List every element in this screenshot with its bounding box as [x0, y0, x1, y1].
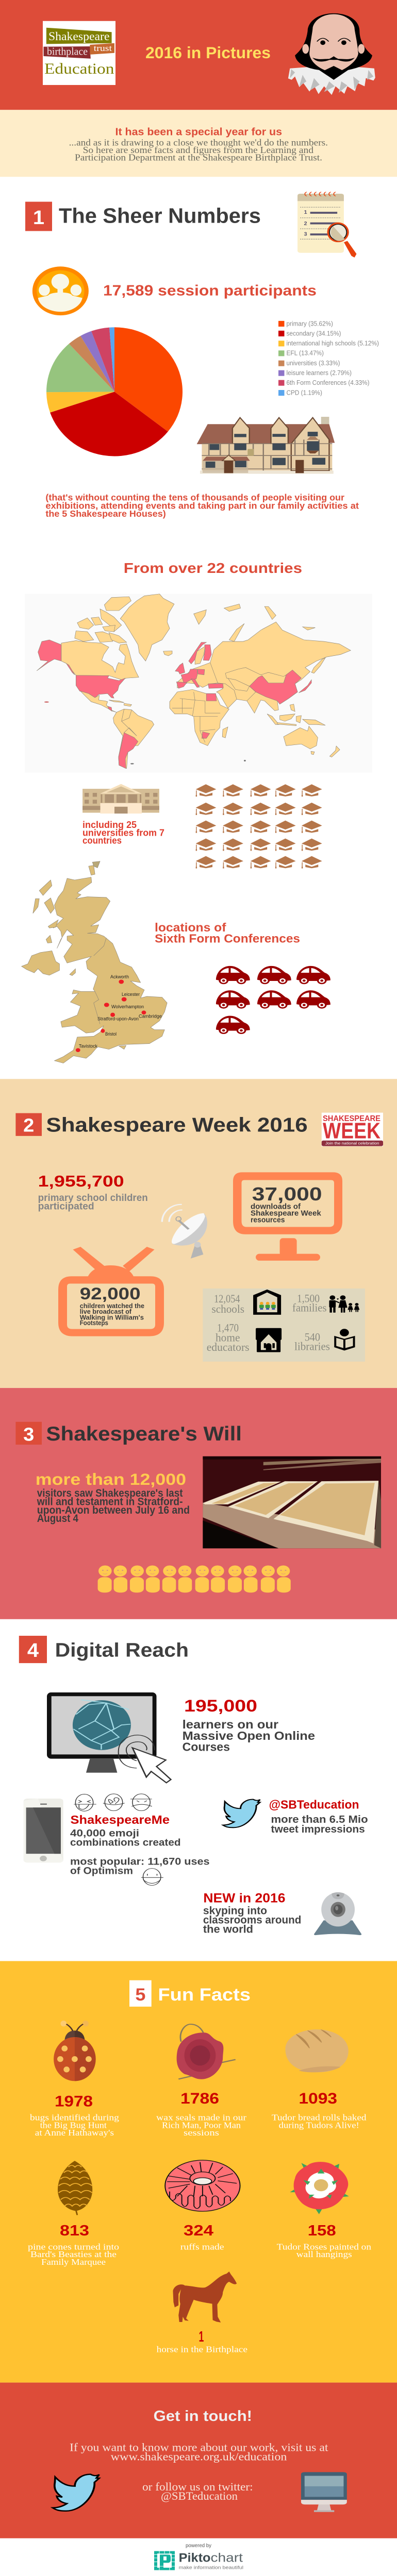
fact: ruffs: ruffs made: [180, 2242, 224, 2251]
icon: download monitor: [233, 1172, 342, 1261]
panel: participant types: [203, 1289, 365, 1362]
statistic: MOOC learners: [183, 1697, 315, 1754]
section number 3: [15, 1422, 42, 1445]
statistic: MOOC learners: learners on our: [183, 1718, 278, 1731]
heading: Shakespeare Week 2016: [46, 1114, 308, 1136]
text block: website: If you want to know more about our work, visit us at: [70, 2441, 328, 2453]
chart legend: primary (35.62%): [287, 320, 333, 327]
icon: television: [58, 1247, 164, 1336]
section number 5: 5: [135, 1985, 145, 2005]
UK map with conference locations: Stratford-upon-Avon: [97, 1016, 139, 1021]
panel: participant types: schools: [211, 1303, 244, 1315]
fact: pine cones: 813: [60, 2223, 89, 2239]
text block: visitors note: the 5 Shakespeare Houses): [45, 509, 166, 519]
fact: ruffs: 324: [184, 2223, 214, 2239]
panel: Piktochart credit: [154, 2543, 243, 2570]
section number 2: 2: [23, 1115, 34, 1136]
text block: will visitors: visitors saw Shakespeare's last: [37, 1487, 183, 1499]
panel: introduction: [0, 110, 397, 177]
fact: bugs: the Big Bug Hunt: [40, 2120, 107, 2130]
heading: The Sheer Numbers: [59, 204, 261, 227]
text block: visitors note: (that's without counting the tens of thousands of people visiting our: [45, 493, 344, 503]
chart legend: international high schools (5.12%): [287, 340, 379, 347]
panel: Fun Facts: [0, 1961, 397, 2383]
fact: bugs: 1978: [55, 2093, 93, 2110]
panel: participant types: 12,054: [214, 1293, 240, 1305]
chart legend: [278, 320, 379, 396]
photo: the will on display: [203, 1456, 381, 1548]
heading: Fun Facts: [158, 1985, 251, 2005]
text block: skype: NEW in 2016: [203, 1891, 286, 1905]
panel: get in touch: [0, 2383, 397, 2538]
text block: twitter: more than 6.5 Mio: [271, 1814, 368, 1825]
section number 3: 3: [23, 1424, 34, 1445]
text block: will visitors: [37, 1487, 190, 1524]
panel: participant types: libraries: [294, 1340, 330, 1352]
heading: sixth form conferences: [155, 921, 300, 945]
fact: pine cones: [28, 2161, 119, 2267]
title: 2016 in Pictures: [145, 44, 271, 62]
icon: horse: [173, 2272, 237, 2323]
text block: visitors note: [45, 493, 359, 519]
icon: reading person: [334, 1329, 355, 1350]
fact: pine cones: Bard's Beasties at the: [30, 2249, 117, 2259]
statistic: downloads: downloads of: [251, 1202, 301, 1211]
icon: Shakespeare's Birthplace house: [197, 417, 335, 474]
statistic: children participated: participated: [38, 1201, 94, 1212]
heading: It has been a special year for us: [115, 126, 282, 138]
fact: wax seals: [156, 2024, 246, 2138]
panel: Digital Reach: [19, 1636, 368, 1935]
fact: wax seals: 1786: [180, 2091, 219, 2107]
text block: twitter: @SBTeducation: [161, 2490, 238, 2502]
chart legend: universities (3.33%): [287, 359, 340, 367]
statistic: broadcast viewers: Footsteps: [80, 1319, 108, 1327]
statistic: broadcast viewers: 92,000: [80, 1285, 141, 1303]
chart legend: secondary (34.15%): [287, 330, 341, 337]
icon: twitter bird: [223, 1800, 260, 1827]
statistic: downloads: resources: [251, 1216, 285, 1225]
fact: Tudor roses: [277, 2162, 371, 2259]
heading: countries: From over 22 countries: [124, 560, 302, 576]
section number 4: 4: [27, 1640, 39, 1662]
text: powered by: powered by: [186, 2543, 212, 2549]
icon: pine cone: [58, 2161, 92, 2215]
fact: wax seals: sessions: [184, 2127, 219, 2138]
statistic: broadcast viewers: live broadcast of: [80, 1308, 132, 1315]
text block: skype: [203, 1891, 301, 1935]
fact: bread rolls: 1093: [299, 2091, 337, 2107]
fact: wax seals: wax seals made in our: [156, 2112, 246, 2122]
text block: ShakespeareMe: most popular: 11,670 uses: [70, 1856, 210, 1867]
icon: school: [253, 1290, 281, 1315]
text block: twitter: @SBTeducation: [269, 1798, 359, 1811]
heading: Get in touch!: [154, 2409, 252, 2425]
icon grid: seven cars: [216, 966, 330, 1034]
panel: participant types: home: [216, 1331, 240, 1344]
world map: [25, 594, 372, 773]
statistic: visitors: more than 12,000: [36, 1470, 186, 1488]
fact: pine cones: pine cones turned into: [28, 2242, 119, 2251]
text block: twitter: [269, 1798, 368, 1835]
statistic: MOOC learners: Courses: [183, 1740, 230, 1754]
icon: family: [329, 1295, 359, 1313]
icon grid: graduation caps: [196, 784, 322, 869]
icon: notepad and magnifying glass: 3: [304, 231, 307, 238]
text block: ShakespeareMe: 40,000 emoji: [70, 1828, 139, 1839]
heading: Digital Reach: [55, 1639, 189, 1661]
text block: universities: including 25: [82, 820, 137, 831]
panel: participant types: 540: [305, 1331, 320, 1343]
panel: participant types: 1,500: [297, 1292, 320, 1304]
fact: bugs: at Anne Hathaway's: [35, 2127, 114, 2138]
UK map with conference locations: Bristol: [105, 1031, 117, 1037]
fact: horse: horse in the Birthplace: [157, 2344, 247, 2354]
fact: horse: [157, 2272, 247, 2354]
icon: webcam: [314, 1892, 361, 1935]
panel: the sheer numbers: [22, 192, 379, 1063]
icon row: twelve visitors: [98, 1565, 291, 1592]
icon: Shakespeare Week logo: SHAKESPEARE: [323, 1113, 381, 1123]
section number 1: 1: [33, 207, 44, 229]
chart: session participants pie: [46, 327, 183, 456]
fact: bugs: [30, 2021, 119, 2138]
text block: universities: [82, 820, 164, 846]
text block: So here are some facts and figures from the Learning and: [83, 145, 313, 155]
statistic: MOOC learners: 195,000: [184, 1697, 257, 1716]
UK map with conference locations: Ackworth: [110, 974, 129, 979]
section number 5: [129, 1980, 152, 2007]
UK map with conference locations: [22, 861, 167, 1063]
text block: ShakespeareMe: [70, 1814, 210, 1876]
statistic: children participated: 1,955,700: [38, 1173, 124, 1190]
text block: ShakespeareMe: combinations created: [70, 1837, 181, 1849]
icon: Shakespeare Birthplace Trust Education logo: trust: [94, 43, 112, 53]
text block: ShakespeareMe: ShakespeareMe: [70, 1814, 170, 1826]
text block: visitors note: exhibitions, attending events and taking part in our family activities at: [45, 501, 359, 511]
panel: participant types: 1,470: [217, 1321, 239, 1334]
fact: ruffs: [165, 2160, 240, 2251]
panel: participant types: families: [292, 1301, 327, 1314]
icon: optimism emoji: [141, 1869, 163, 1885]
icon: smartphone: [24, 1799, 63, 1862]
fact: bread rolls: [272, 2029, 367, 2130]
icon: Shakespeare Week logo: [322, 1113, 383, 1146]
icon: twitter bird: [53, 2475, 99, 2511]
text block: twitter: or follow us on twitter:: [142, 2481, 253, 2493]
text block: website: www.shakespeare.org.uk/education: [111, 2450, 287, 2463]
icon: satellite dish: [162, 1205, 207, 1259]
text: Piktochart wordmark: chart: [210, 2551, 243, 2565]
section number 4: [19, 1636, 47, 1663]
panel: header: [0, 0, 397, 110]
fact: pine cones: Family Marquee: [41, 2257, 106, 2267]
text block: skype: the world: [203, 1923, 253, 1935]
text block: will visitors: upon-Avon between July 16 and: [37, 1504, 190, 1516]
heading: sixth form conferences: Sixth Form Conferences: [155, 932, 300, 945]
fact: bugs: bugs identified during: [30, 2112, 119, 2122]
fact: bread rolls: Tudor bread rolls baked: [272, 2112, 367, 2122]
chart legend: 6th Form Conferences (4.33%): [287, 379, 369, 386]
icon: wax seal: [177, 2024, 236, 2079]
text block: will visitors: will and testament in Stratford-: [37, 1496, 183, 1507]
fact: Tudor roses: Tudor Roses painted on: [277, 2242, 371, 2251]
chart legend: leisure learners (2.79%): [287, 369, 352, 377]
icon: Shakespeare Birthplace Trust Education logo: Education: [44, 60, 114, 77]
statistic: downloads: 37,000: [252, 1183, 322, 1205]
text block: website: [70, 2441, 328, 2463]
text block: [69, 138, 328, 162]
icon: university building: [82, 784, 159, 814]
icon: computer with globe and cursor: [47, 1692, 171, 1783]
section number 1: [25, 202, 52, 231]
icon: bread roll: [285, 2029, 349, 2072]
statistic: session participants: 17,589 session participants: [103, 283, 317, 299]
statistic: children participated: [38, 1173, 148, 1212]
fact: horse: 1: [199, 2329, 204, 2345]
fact: Tudor roses: wall hangings: [296, 2249, 352, 2259]
icon: ladybird: [54, 2021, 96, 2081]
fact: wax seals: Rich Man, Poor Man: [162, 2120, 241, 2130]
icon: participants circle: [32, 266, 89, 315]
statistic: children participated: primary school children: [38, 1193, 148, 1204]
statistic: broadcast viewers: children watched the: [80, 1302, 144, 1310]
text: Piktochart wordmark: [179, 2551, 243, 2570]
chart legend: CPD (1.19%): [287, 389, 322, 396]
heading: sixth form conferences: locations of: [155, 921, 226, 934]
fact: bread rolls: during Tudors Alive!: [279, 2120, 359, 2130]
statistic: broadcast viewers: [80, 1285, 144, 1327]
text: Piktochart wordmark: make information beautiful: [179, 2565, 243, 2570]
fact: Tudor roses: 158: [308, 2223, 336, 2239]
text block: skype: classrooms around: [203, 1914, 301, 1926]
icon: notepad and magnifying glass: [297, 192, 356, 258]
statistic: MOOC learners: Massive Open Online: [183, 1730, 315, 1742]
UK map with conference locations: Tavistock: [79, 1044, 97, 1049]
icon: ruff: [165, 2160, 240, 2211]
text: Piktochart wordmark: Pikto: [179, 2551, 210, 2565]
icon: Shakespeare Week logo: WEEK: [323, 1118, 381, 1143]
panel: Shakespeare Week 2016: [0, 1079, 397, 1388]
icon: Shakespeare Birthplace Trust Education logo: birthplace: [47, 45, 88, 58]
icon: home: [256, 1328, 282, 1352]
UK map with conference locations: Leicester: [122, 992, 140, 997]
text block: will visitors: August 4: [37, 1513, 78, 1524]
icon: Tudor rose: [290, 2162, 349, 2214]
section number 2: [15, 1113, 42, 1136]
icons: emoji faces: [74, 1794, 152, 1811]
text block: Participation Department at the Shakespeare Birthplace Trust.: [75, 152, 322, 162]
chart legend: EFL (13.47%): [287, 349, 324, 357]
icon: Shakespeare Birthplace Trust Education logo: [43, 21, 115, 85]
icon: Shakespeare Birthplace Trust Education logo: Shakespeare: [48, 30, 109, 43]
text block: skype: skyping into: [203, 1905, 267, 1917]
icon: desktop computer: [301, 2472, 347, 2512]
UK map with conference locations: Cambridge: [139, 1014, 162, 1019]
text block: ...and as it is drawing to a close we thought we'd do the numbers.: [69, 138, 328, 147]
text block: twitter: [142, 2481, 253, 2502]
statistic: broadcast viewers: Walking in William's: [80, 1314, 144, 1321]
text block: universities: countries: [82, 836, 122, 846]
panel: participant types: educators: [207, 1341, 250, 1353]
icon: notepad and magnifying glass: 1: [304, 209, 307, 215]
icon: notepad and magnifying glass: 2: [304, 221, 307, 227]
panel: Shakespeare's Will: [0, 1388, 397, 1619]
text block: universities: universities from 7: [82, 828, 164, 839]
text block: twitter: tweet impressions: [271, 1823, 365, 1835]
statistic: downloads: Shakespeare Week: [251, 1209, 321, 1218]
icon: Shakespeare portrait: [288, 13, 375, 95]
heading: Shakespeare's Will: [46, 1423, 242, 1445]
text block: ShakespeareMe: of Optimism: [70, 1866, 133, 1876]
icon: Shakespeare Week logo: Join the national celebration: [325, 1141, 379, 1146]
statistic: downloads: [251, 1183, 322, 1225]
icon: Piktochart logo: [154, 2551, 175, 2570]
UK map with conference locations: Wolverhampton: [111, 1004, 144, 1009]
